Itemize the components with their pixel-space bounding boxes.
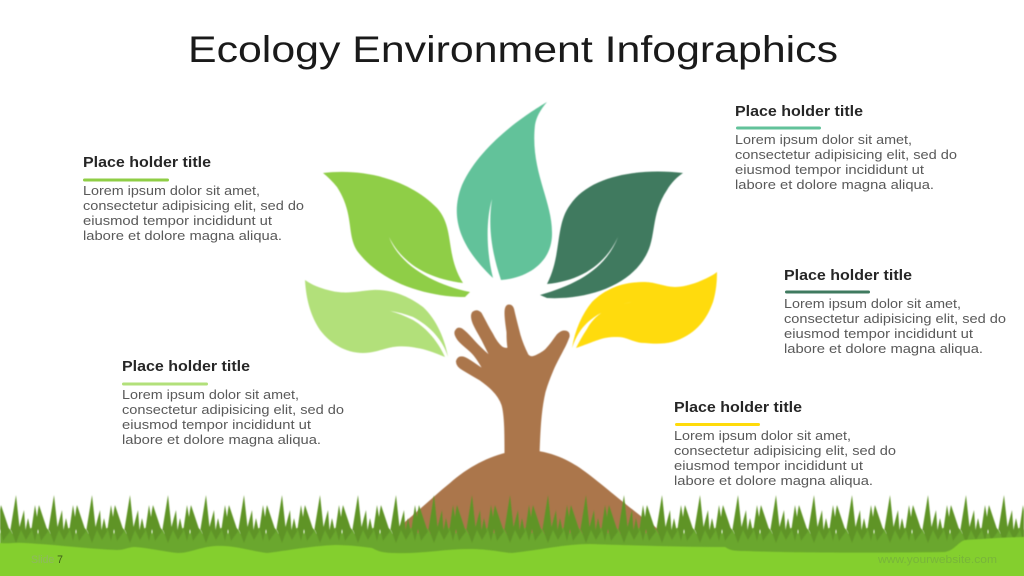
accent bar — [736, 126, 821, 130]
body text: eiusmod tempor incididunt ut — [674, 459, 864, 473]
accent bar — [83, 178, 169, 182]
body text: Lorem ipsum dolor sit amet, — [122, 388, 299, 402]
ground — [0, 537, 1024, 576]
body text: eiusmod tempor incididunt ut — [784, 327, 974, 341]
body text: Lorem ipsum dolor sit amet, — [735, 133, 912, 147]
body text: consectetur adipisicing elit, sed do — [784, 312, 1006, 326]
leaf: light green, lower left — [305, 280, 448, 357]
body text: eiusmod tempor incididunt ut — [735, 163, 925, 177]
body text — [122, 388, 344, 447]
accent bar — [675, 423, 760, 426]
leaf: teal, centre — [457, 102, 552, 280]
body text: consectetur adipisicing elit, sed do — [674, 444, 896, 458]
body text: labore et dolore magna aliqua. — [784, 342, 983, 356]
mound — [395, 450, 662, 550]
body text: eiusmod tempor incididunt ut — [83, 214, 273, 228]
body text: consectetur adipisicing elit, sed do — [83, 199, 304, 213]
heading: Place holder title — [122, 359, 250, 375]
body text: labore et dolore magna aliqua. — [735, 178, 934, 192]
panel: upper right — [735, 104, 957, 192]
illustration: hand tree with leaves — [305, 102, 717, 550]
body text: consectetur adipisicing elit, sed do — [735, 148, 957, 162]
website: www.yourwebsite.com — [877, 554, 997, 566]
body text: Lorem ipsum dolor sit amet, — [784, 297, 961, 311]
body text: labore et dolore magna aliqua. — [674, 474, 873, 488]
body text: eiusmod tempor incididunt ut — [122, 418, 312, 432]
heading: Place holder title — [674, 400, 802, 416]
body text: labore et dolore magna aliqua. — [122, 433, 321, 447]
body text — [735, 133, 957, 192]
leaf: dark green, upper right — [540, 172, 683, 298]
heading: Place holder title — [83, 155, 211, 171]
body text: Lorem ipsum dolor sit amet, — [83, 184, 260, 198]
title: Ecology Environment Infographics — [188, 29, 838, 70]
panel: upper left — [83, 155, 304, 243]
panel: middle right — [784, 268, 1006, 356]
accent bar — [122, 382, 208, 386]
heading: Place holder title — [735, 104, 863, 120]
slide number: Slide 7 — [31, 554, 63, 566]
leaf: yellow, lower right — [572, 272, 717, 348]
heading: Place holder title — [784, 268, 912, 284]
leaf: mid green, upper left — [323, 172, 470, 297]
grass: blades — [0, 490, 1024, 550]
accent bar — [785, 290, 870, 294]
body text — [674, 429, 896, 488]
panel: lower right — [674, 400, 896, 488]
body text — [784, 297, 1006, 356]
body text: Lorem ipsum dolor sit amet, — [674, 429, 851, 443]
grass: lighter base — [0, 525, 1024, 565]
body text: consectetur adipisicing elit, sed do — [122, 403, 344, 417]
panel: lower left — [122, 359, 344, 447]
body text — [83, 184, 304, 243]
hand trunk — [455, 305, 569, 456]
body text: labore et dolore magna aliqua. — [83, 229, 282, 243]
